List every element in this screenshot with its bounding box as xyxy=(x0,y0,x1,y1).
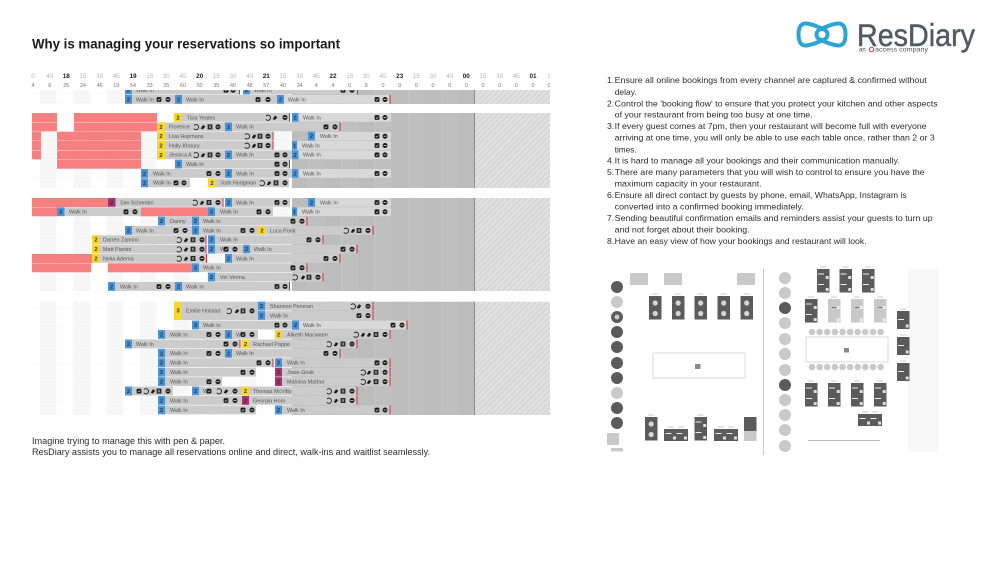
time axis header: 45 xyxy=(113,73,120,80)
central room box xyxy=(653,353,745,378)
numbered list of reasons: 1. xyxy=(607,75,614,85)
timeline section 4: 2 xyxy=(160,370,163,376)
timeline section 1: 2 xyxy=(127,88,130,94)
time axis header: 15 xyxy=(213,73,220,80)
timeline section 3: 2 xyxy=(210,238,213,244)
timeline section 4: 3 xyxy=(194,323,198,329)
timeline section 4: Walk In xyxy=(170,361,188,367)
time axis header: 4 xyxy=(315,83,318,89)
time axis header: 20 xyxy=(196,73,204,80)
timeline section 4: 2 xyxy=(244,342,247,348)
timeline section 4: Walk In xyxy=(170,351,188,357)
time axis header: 22 xyxy=(329,73,337,80)
timeline section 4: 2 xyxy=(194,389,197,395)
timeline section 2: Tara Yeates xyxy=(187,115,215,121)
wordmark: ResDiary xyxy=(857,17,975,53)
numbered list of reasons: of your restaurant from being too busy at one time. xyxy=(615,110,813,120)
timeline section 4: 2 xyxy=(160,380,163,386)
numbered list of reasons: times. xyxy=(615,144,637,154)
timeline section 2: Holly Khoury xyxy=(169,143,200,149)
top light tables xyxy=(630,273,755,285)
third row tables right xyxy=(805,381,886,406)
timeline section 3: 2 xyxy=(210,247,213,253)
time axis header: 15 xyxy=(280,73,287,80)
timeline section 4: 2 xyxy=(127,342,130,348)
timeline section 3: 2 xyxy=(127,228,130,234)
timeline section 4: 3 xyxy=(176,309,180,315)
timeline section 3: Nelia Adema xyxy=(103,256,134,262)
timeline section 3: Walk In xyxy=(203,219,221,225)
time axis header: 0 xyxy=(498,83,501,89)
timeline section 3: 2 xyxy=(94,256,98,262)
timeline section 4: W xyxy=(203,389,209,395)
timeline section 1: Walk In xyxy=(186,97,204,103)
time axis header: 30 xyxy=(230,73,237,80)
timeline section 3: W xyxy=(220,247,226,253)
time axis header: 30 xyxy=(430,73,437,80)
time axis header: 4 xyxy=(32,83,34,89)
timeline section 3: 2 xyxy=(310,200,313,206)
timeline section 1: 2 xyxy=(245,88,248,94)
timeline section 4: Walk In xyxy=(170,332,188,338)
timeline section 4: Alkesh Macwaen xyxy=(287,332,328,338)
timeline section 3: 2 xyxy=(160,219,163,225)
time axis header: 0 xyxy=(448,83,451,89)
numbered list of reasons: 8. xyxy=(607,236,614,246)
timeline section 3: 2 xyxy=(210,210,213,216)
infographic canvas xyxy=(32,22,976,457)
timeline section 2: 2 xyxy=(159,134,163,140)
time axis header: 45 xyxy=(180,73,187,80)
timeline section 3: Walk In xyxy=(220,210,238,216)
time axis header: 46 xyxy=(97,83,103,89)
numbered list of reasons: If every guest comes at 7pm, then your restaurant will become full with everyone xyxy=(615,121,927,131)
timeline section 3: Walk In xyxy=(320,200,338,206)
timeline section 3: Walk In xyxy=(136,228,154,234)
timeline section 4: W xyxy=(236,332,242,338)
timeline section 3 xyxy=(32,198,550,291)
numbered list of reasons: Sending beautiful confirmation emails and reminders assist your guests to turn up xyxy=(615,213,933,223)
timeline section 3: Walk In xyxy=(69,210,87,216)
bottom tables left xyxy=(645,415,756,441)
reservation timeline chart xyxy=(31,73,551,415)
timeline section 3: Walk In xyxy=(120,284,138,290)
timeline section 4: Walk In xyxy=(303,323,321,329)
time axis header: 15 xyxy=(146,73,154,80)
timeline section 3: Sim Schembri xyxy=(120,200,154,206)
timeline section 4: 2 xyxy=(244,389,247,395)
title: Why is managing your reservations so important xyxy=(32,36,341,52)
timeline section 2: 2 xyxy=(293,171,297,177)
timeline section 3: 2 xyxy=(210,275,213,281)
timeline section 2: 2 xyxy=(159,153,163,159)
far right tables xyxy=(897,309,910,381)
time axis header: 48 xyxy=(247,83,253,89)
time axis header: 0 xyxy=(31,73,35,80)
numbered list of reasons: maximum capacity in your restaurant. xyxy=(615,178,762,188)
timeline section 2: 2 xyxy=(210,181,214,187)
time axis header: 0 xyxy=(432,83,434,89)
numbered list of reasons: 2. xyxy=(607,98,614,108)
timeline section 3: 2 xyxy=(260,228,264,234)
time axis header: 30 xyxy=(163,73,170,80)
time axis header: 33 xyxy=(147,83,153,89)
timeline section 2: 2 xyxy=(143,171,146,177)
timeline section 3: 2 xyxy=(94,247,98,253)
timeline section 2: 1 xyxy=(293,143,297,149)
timeline section 2: Jessica A xyxy=(169,153,192,159)
tagline xyxy=(859,47,928,54)
time axis header: 15 xyxy=(80,73,87,80)
time axis header: 0 xyxy=(382,83,384,89)
timeline section 4: Walk In xyxy=(136,342,154,348)
timeline section 3: Vin Verma xyxy=(220,275,245,281)
timeline section 2: Walk In xyxy=(320,134,338,140)
time axis header: 25 xyxy=(63,83,69,89)
timeline section 3: Walk In xyxy=(254,247,272,253)
right column of round tables xyxy=(779,272,791,452)
timeline section 2: Florence xyxy=(169,125,190,131)
timeline section 3: 2 xyxy=(177,284,180,290)
timeline section 2: Walk In xyxy=(236,125,254,131)
timeline section 2: Walk In xyxy=(302,143,320,149)
timeline section 3: Walk In xyxy=(186,284,204,290)
time axis header: 15 xyxy=(413,73,420,80)
time axis header: 01 xyxy=(529,73,537,80)
time axis header: 1 xyxy=(547,73,551,80)
time axis header: 19 xyxy=(113,83,119,89)
time axis header: 6 xyxy=(48,83,51,89)
time axis header: 18 xyxy=(63,73,70,80)
numbered list of reasons: 6. xyxy=(607,190,614,200)
timeline section 4: Josie Gnak xyxy=(287,370,314,376)
time axis header: 0 xyxy=(348,83,351,89)
numbered list of reasons: Ensure all online bookings from every channel are captured & confirmed without xyxy=(615,75,927,85)
timeline section 4: 2 xyxy=(127,389,130,395)
timeline section 3: Walk In xyxy=(236,256,254,262)
numbered list of reasons: 4. xyxy=(607,156,614,166)
timeline section 3: 2 xyxy=(194,228,197,234)
timeline section 1: Walk In xyxy=(136,97,154,103)
timeline section 4: Walk In xyxy=(270,313,288,319)
timeline section 3: 1 xyxy=(293,210,297,216)
time axis header: 15 xyxy=(480,73,487,80)
timeline section 2: 2 xyxy=(227,171,230,177)
timeline section 1: 2 xyxy=(127,97,130,103)
time axis header: 0 xyxy=(465,83,468,89)
timeline section 4: Walk In xyxy=(170,398,188,404)
timeline section 2 xyxy=(32,113,550,188)
timeline section 4: Walk In xyxy=(170,370,188,376)
timeline section 4: Mahima Mathur xyxy=(287,380,325,386)
timeline section 2: Josh Hodgman xyxy=(220,181,256,187)
time axis header: 45 xyxy=(513,73,520,80)
numbered list of reasons: arriving at one time, you will only be able to use each table once, rather than 2 or 3 xyxy=(615,133,935,143)
timeline section 2: Walk In xyxy=(303,115,321,121)
time axis header: 30 xyxy=(363,73,370,80)
timeline section 3: 2 xyxy=(59,210,63,216)
time axis header: 0 xyxy=(532,83,534,89)
time axis header: 0 xyxy=(482,83,484,89)
top tables right xyxy=(817,267,874,292)
time axis header: 45 xyxy=(46,73,54,80)
numbered list of reasons: Control the 'booking flow' to ensure that you protect your kitchen and other aspects xyxy=(615,98,938,108)
time axis header: 15 xyxy=(346,73,354,80)
timeline section 3: 2 xyxy=(227,200,230,206)
timeline section 3: Darren Zannini xyxy=(103,238,139,244)
time axis header: 0 xyxy=(548,83,550,89)
time axis header: 35 xyxy=(213,83,219,89)
time axis header: 19 xyxy=(129,73,137,80)
time axis header: 23 xyxy=(396,73,404,80)
time axis header: 24 xyxy=(80,83,86,89)
timeline section 4: Walk In xyxy=(287,408,305,414)
timeline section 2: Walk In xyxy=(186,162,204,168)
timeline section 4: Walk In xyxy=(287,361,305,367)
numbered list of reasons: converted into a confirmed booking immediately. xyxy=(615,202,804,212)
timeline section 2: 2 xyxy=(177,162,180,168)
timeline section 4: 2 xyxy=(277,370,280,376)
tagline: access company xyxy=(875,48,928,54)
timeline section 4: Thomas McVitty xyxy=(253,389,292,395)
timeline section 4: Emilie Holstad xyxy=(186,309,220,315)
timeline section 4: 2 xyxy=(244,398,247,404)
timeline section 2: Lisa Hopmans xyxy=(169,134,204,140)
timeline section 2: 2 xyxy=(176,115,180,121)
timeline section 4: 2 xyxy=(227,332,230,338)
caption text xyxy=(32,436,430,457)
timeline section 4: 2 xyxy=(160,408,163,414)
time axis header: 30 xyxy=(296,73,304,80)
timeline section 2: 2 xyxy=(143,181,146,187)
numbered list of reasons xyxy=(607,75,938,246)
timeline section 2: 2 xyxy=(293,115,297,121)
numbered list of reasons: Ensure all direct contact by guests by phone, email, WhatsApp, Instagram is xyxy=(615,190,907,200)
time axis header: 8 xyxy=(365,83,368,89)
time axis header: 4 xyxy=(332,83,334,89)
timeline section 3: 2 xyxy=(245,247,248,253)
time axis header: 0 xyxy=(515,83,518,89)
time axis header: 45 xyxy=(446,73,454,80)
numbered list of reasons: and not forget about their booking. xyxy=(615,224,750,234)
timeline section 3: 2 xyxy=(110,200,114,206)
numbered list of reasons: Have an easy view of how your bookings and restaurant will look. xyxy=(615,236,867,246)
timeline section 2: 2 xyxy=(159,125,163,131)
timeline section 2: Walk In xyxy=(236,153,254,159)
time axis header: 34 xyxy=(297,83,303,89)
timeline section 1 xyxy=(32,90,550,104)
timeline section 4: Walk In xyxy=(170,408,188,414)
timeline section 4: 2 xyxy=(277,332,280,338)
ResDiary logo xyxy=(798,17,975,54)
timeline section 3: 2 xyxy=(94,238,98,244)
time axis header: 57 xyxy=(263,83,269,89)
timeline section 3: Walk In xyxy=(220,238,238,244)
time axis header: 00 xyxy=(463,73,470,80)
timeline section 3: Danny xyxy=(170,219,186,225)
timeline section 2: Walk In xyxy=(236,171,254,177)
numbered list of reasons: delay. xyxy=(615,87,637,97)
timeline section 4: 2 xyxy=(277,380,280,386)
numbered list of reasons: 5. xyxy=(607,167,614,177)
timeline section 3: 2 xyxy=(194,266,197,272)
numbered list of reasons: There are many parameters that you will wish to control to ensure you have the xyxy=(615,167,925,177)
numbered list of reasons: 3. xyxy=(607,121,614,131)
time axis header: 60 xyxy=(180,83,186,89)
time axis header: 45 xyxy=(246,73,254,80)
timeline section 4: 2 xyxy=(227,351,230,357)
timeline section 3: Walk In xyxy=(203,228,221,234)
timeline section 1: Walk In xyxy=(254,88,272,94)
timeline section 2: Walk In xyxy=(303,153,321,159)
timeline section 2: 2 xyxy=(310,134,313,140)
icon: blue bow-tie mark xyxy=(798,24,846,46)
timeline section 4: Shannon Penman xyxy=(270,304,313,310)
timeline section 2: 2 xyxy=(293,153,297,159)
time axis header: 30 xyxy=(96,73,104,80)
timeline section 4: 2 xyxy=(294,323,297,329)
timeline section 4: Walk In xyxy=(170,380,188,386)
numbered list of reasons: It is hard to manage all your bookings and their communication manually. xyxy=(615,156,900,166)
numbered list of reasons: 7. xyxy=(607,213,614,223)
timeline section 4: Georgia Horn xyxy=(253,398,285,404)
row of two-seat tables xyxy=(649,294,753,320)
time axis header: 35 xyxy=(163,83,169,89)
timeline section 4: Rachael Pappe xyxy=(253,342,290,348)
time axis header: 50 xyxy=(197,83,203,89)
bar line xyxy=(808,439,880,442)
timeline section 3: 2 xyxy=(110,284,113,290)
floor divider xyxy=(762,268,765,455)
timeline section 4: 2 xyxy=(160,361,163,367)
caption text: ResDiary assists you to manage all reservations online and direct, walk-ins and waitlist seamlessly. xyxy=(32,447,430,457)
time axis header xyxy=(32,74,550,87)
timeline section 3: 2 xyxy=(227,256,230,262)
time axis header: 0 xyxy=(398,83,401,89)
timeline section 2: Walk In xyxy=(303,171,321,177)
timeline section 1: 2 xyxy=(177,97,180,103)
timeline section 2: 2 xyxy=(227,153,230,159)
time axis header: 45 xyxy=(313,73,320,80)
time axis header: 45 xyxy=(380,73,387,80)
timeline section 4: 2 xyxy=(260,314,263,320)
timeline section 4: 2 xyxy=(277,408,280,414)
left column of round tables xyxy=(607,281,623,452)
time axis header: 0 xyxy=(415,83,418,89)
time axis header: 40 xyxy=(230,83,236,89)
timeline section 3: Walk In xyxy=(302,210,320,216)
restaurant floor plan xyxy=(607,267,938,455)
timeline section 2: 2 xyxy=(159,143,163,149)
time axis header: 40 xyxy=(280,83,286,89)
timeline section 4: 2 xyxy=(260,304,263,310)
time axis header: 54 xyxy=(130,83,136,89)
tagline: an xyxy=(859,48,866,54)
timeline section 3: Matt Pianini xyxy=(103,247,131,253)
time axis header: 21 xyxy=(263,73,270,80)
panel: right-side background strip xyxy=(908,269,938,452)
timeline section 4: 2 xyxy=(277,361,280,367)
timeline section 4: 2 xyxy=(160,332,163,338)
timeline section 2: Walk In xyxy=(153,181,171,187)
timeline section 1: Walk In xyxy=(288,97,306,103)
timeline section 4: 2 xyxy=(160,351,163,357)
timeline section 2: 2 xyxy=(227,125,230,131)
timeline section 1: Walk In xyxy=(136,88,154,94)
timeline section 4: Walk In xyxy=(203,323,221,329)
timeline section 4 xyxy=(32,302,550,415)
second row tables right xyxy=(805,297,886,322)
timeline section 4: 2 xyxy=(160,398,163,404)
long banquet table with stools xyxy=(806,329,888,370)
timeline section 4: Walk In xyxy=(236,351,254,357)
time axis header: 30 xyxy=(496,73,504,80)
caption text: Imagine trying to manage this with pen & paper. xyxy=(32,436,225,446)
timeline section 3: Luca Ponti xyxy=(270,228,295,234)
timeline section 3: Walk In xyxy=(236,200,254,206)
timeline section 1: 2 xyxy=(279,97,282,103)
timeline section 3: 2 xyxy=(194,219,197,225)
wide table lower right xyxy=(858,412,882,426)
timeline section 2: Walk In xyxy=(153,171,171,177)
timeline section 3: Walk In xyxy=(203,266,221,272)
